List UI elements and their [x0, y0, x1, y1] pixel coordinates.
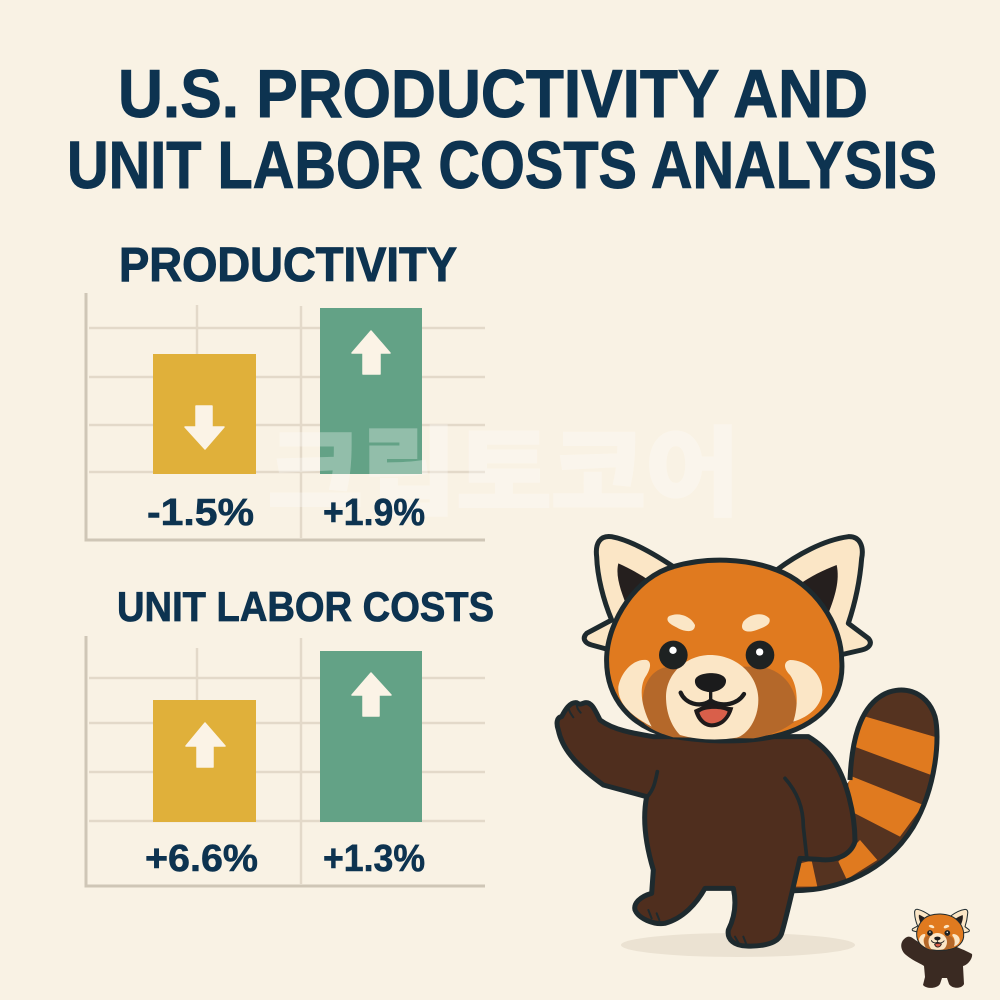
heading: unit labor costs: UNIT LABOR COSTS — [117, 583, 494, 630]
arm crease — [647, 772, 807, 857]
illustration: red panda mascot — [557, 536, 940, 946]
watermark: 크립토코어 — [268, 421, 740, 528]
tail — [790, 690, 940, 891]
head — [584, 536, 870, 741]
shadow under panda — [621, 933, 855, 957]
heading: productivity: PRODUCTIVITY — [119, 239, 457, 292]
toes — [568, 703, 746, 943]
panel: productivity chart — [86, 293, 485, 540]
body — [557, 703, 855, 946]
title: U.S. PRODUCTIVITY AND — [118, 56, 868, 132]
bar: productivity green +1.9% — [320, 308, 422, 474]
value: +1.3%: +1.3% — [323, 838, 425, 880]
value: -1.5%: -1.5% — [147, 492, 254, 534]
bar: unit labor costs yellow +6.6% — [153, 700, 256, 822]
icon: up arrow green bar — [352, 673, 391, 716]
icon: up arrow yellow bar — [186, 723, 225, 767]
bar: unit labor costs green +1.3% — [320, 651, 422, 822]
icon: up arrow — [352, 331, 390, 374]
title — [67, 56, 937, 203]
value: +6.6%: +6.6% — [145, 838, 258, 880]
bar: productivity yellow -1.5% — [153, 354, 256, 474]
panel: unit labor costs chart — [86, 636, 485, 886]
icon: mini red panda — [901, 909, 972, 988]
value: +1.9%: +1.9% — [323, 492, 425, 534]
icon: down arrow — [185, 406, 224, 449]
